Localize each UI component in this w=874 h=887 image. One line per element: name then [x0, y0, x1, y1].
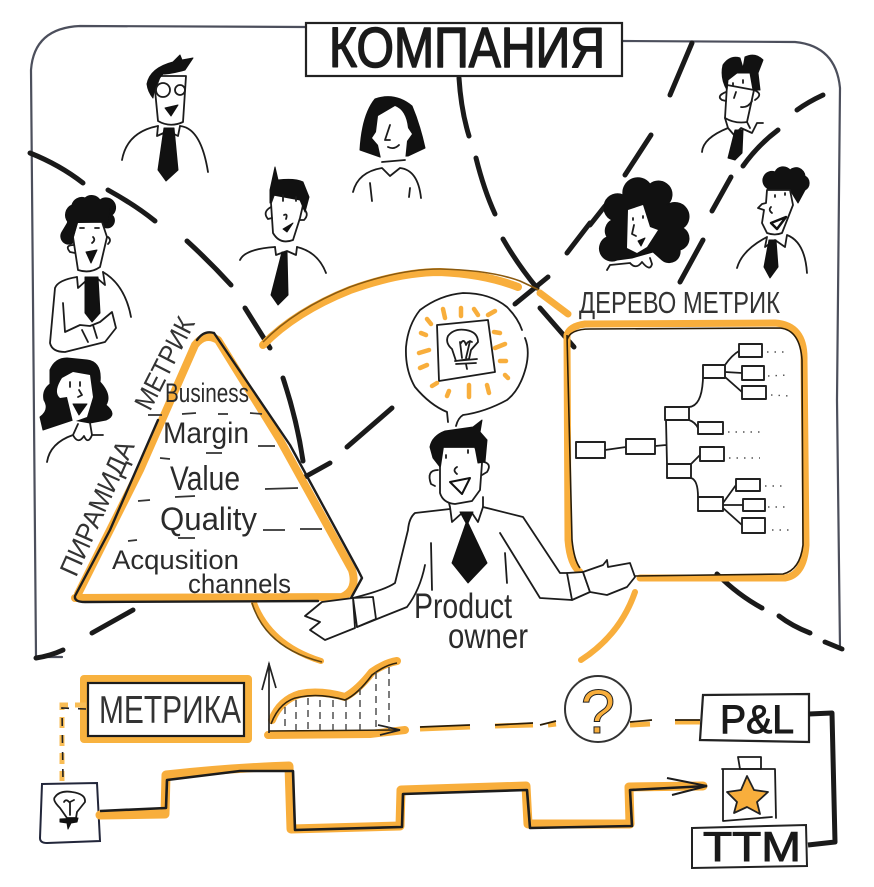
TTM box: TTM	[703, 823, 801, 870]
tie	[452, 512, 487, 583]
product owner caption: Product	[414, 587, 512, 626]
person: man top right	[702, 55, 763, 160]
stepped roadmap line with arrow	[100, 766, 707, 830]
right cuff and hand	[567, 572, 590, 600]
pyramid levels	[128, 413, 322, 541]
pyramid orange outline	[75, 337, 354, 598]
person: man right	[737, 167, 809, 278]
person: man with glasses	[122, 55, 208, 181]
metric tree panel	[567, 285, 806, 578]
icon: gift with star	[722, 757, 776, 821]
shirt	[353, 507, 572, 627]
person: woman with bob	[353, 97, 425, 201]
metric tree diagram	[576, 344, 790, 533]
metric tree caption: ДЕРЕВО МЕТРИК	[579, 285, 780, 320]
metric label box: МЕТРИКА	[99, 689, 241, 732]
pyramid labels: Quality	[160, 501, 257, 537]
pyramid side caption	[54, 312, 201, 580]
product owner caption: owner	[448, 617, 528, 656]
pyramid labels: Business	[165, 378, 249, 408]
pyramid labels	[112, 378, 291, 599]
person: curly man with raised hand	[50, 195, 131, 352]
person: curly woman	[599, 178, 689, 270]
idea icon box	[40, 783, 100, 843]
pyramid side caption: ПИРАМИДА	[54, 436, 140, 580]
metric area chart	[262, 661, 405, 735]
orange circle arcs	[252, 269, 635, 662]
dashed link: idea to metric	[62, 705, 86, 781]
question mark circle: ?	[581, 678, 615, 747]
light rays	[419, 308, 508, 397]
pyramid labels: Margin	[163, 417, 249, 450]
pyramid black outline	[75, 332, 362, 602]
pyramid of metrics	[54, 312, 362, 602]
question mark circle	[565, 676, 631, 747]
P&L box	[700, 694, 809, 742]
connector: P&L to TTM	[808, 713, 835, 845]
person: man in the centre-left	[240, 167, 326, 305]
product owner figure	[305, 420, 635, 656]
dashed lines dividing company	[30, 43, 842, 658]
pyramid labels: channels	[188, 569, 291, 599]
person: woman on the left	[40, 358, 112, 462]
dashed link: chart to question	[420, 720, 700, 729]
metric label box	[84, 679, 248, 739]
P&L box: P&L	[720, 698, 794, 742]
icon: light bulb	[447, 330, 478, 369]
title box: КОМПАНИЯ	[329, 16, 605, 80]
thought bubble with idea	[406, 293, 528, 426]
pyramid labels: Value	[170, 460, 240, 498]
product owner caption	[414, 587, 528, 656]
left cuff and hand	[353, 597, 376, 627]
company frame	[31, 26, 840, 657]
pyramid side caption: МЕТРИК	[129, 312, 201, 415]
pyramid labels: Acqusition	[112, 545, 239, 575]
